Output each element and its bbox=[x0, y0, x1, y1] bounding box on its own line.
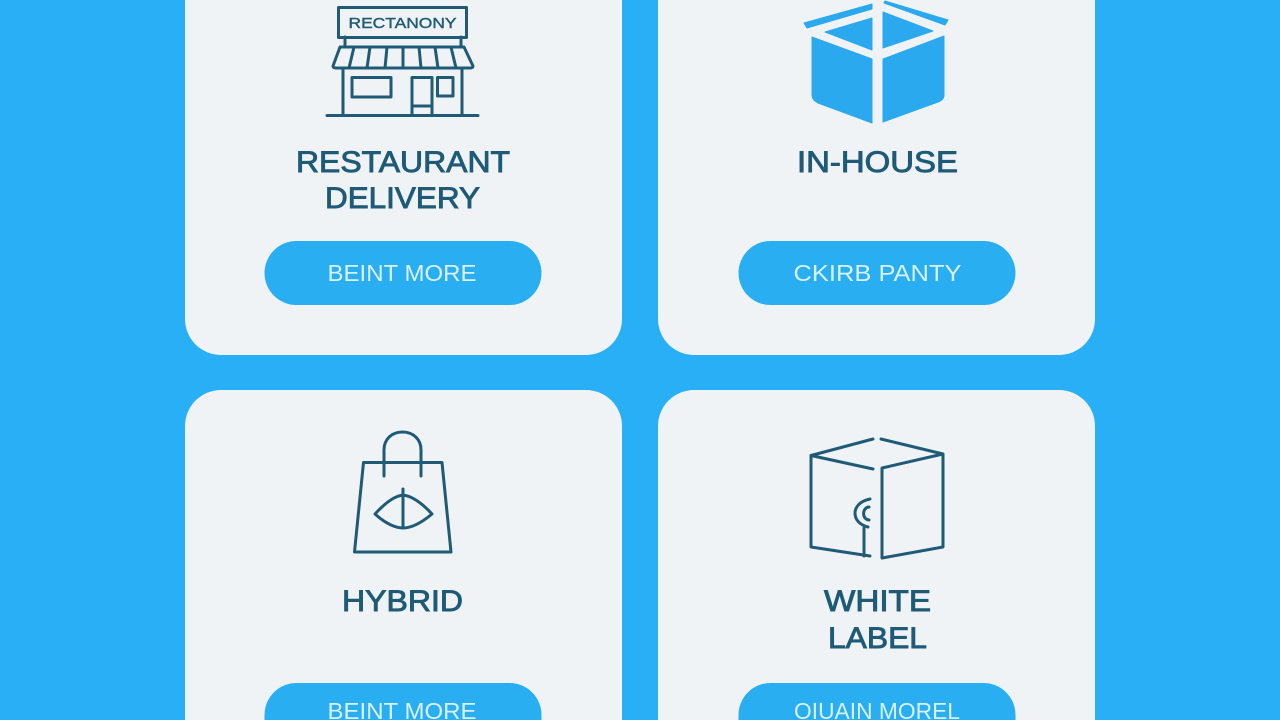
heading: white label: WHITE bbox=[824, 585, 931, 618]
heading: restaurant delivery: RESTAURANT bbox=[296, 146, 510, 179]
button: restaurant delivery: BEINT MORE bbox=[328, 260, 476, 286]
button: in-house: CKIRB PANTY bbox=[794, 260, 962, 286]
card background bbox=[658, 390, 1095, 720]
button: restaurant delivery bbox=[264, 241, 542, 305]
card background bbox=[185, 390, 622, 720]
icon: restaurant storefront bbox=[327, 8, 478, 116]
card background bbox=[658, 0, 1095, 355]
panel: white label bbox=[658, 390, 1095, 720]
heading: hybrid: HYBRID bbox=[342, 585, 463, 618]
icon: restaurant storefront: RECTANONY bbox=[348, 15, 456, 32]
card background bbox=[185, 0, 622, 355]
heading: in-house: IN-HOUSE bbox=[797, 146, 958, 179]
heading: restaurant delivery bbox=[296, 146, 510, 215]
icon: filled open box bbox=[804, 1, 948, 123]
heading: restaurant delivery: DELIVERY bbox=[325, 182, 480, 215]
button: white label bbox=[738, 683, 1016, 720]
button: in-house bbox=[738, 241, 1016, 305]
heading: white label bbox=[824, 585, 931, 655]
button: hybrid bbox=[264, 683, 542, 720]
panel: restaurant delivery bbox=[185, 0, 622, 355]
panel: in-house bbox=[658, 0, 1095, 355]
heading: white label: LABEL bbox=[828, 622, 927, 655]
icon: shopping bag with eye bbox=[354, 432, 451, 552]
panel: hybrid bbox=[185, 390, 622, 720]
icon: outlined box with keyhole bbox=[811, 439, 943, 558]
